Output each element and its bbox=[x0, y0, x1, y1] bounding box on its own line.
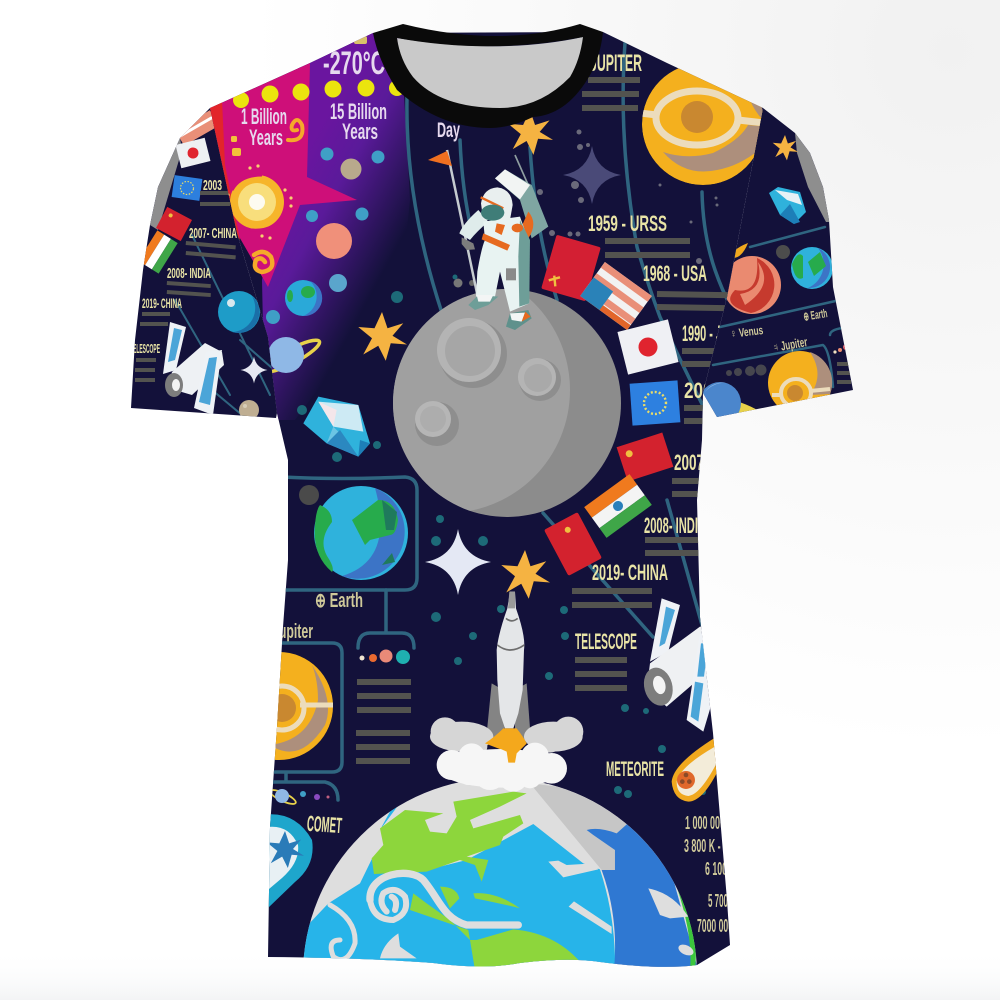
moon bbox=[324, 267, 621, 517]
icon: swirl bbox=[254, 252, 272, 272]
crater: right bbox=[518, 358, 561, 401]
bars: 2008 bbox=[645, 537, 700, 556]
flag: USA sleeve bbox=[180, 110, 214, 144]
bars: 1959 bbox=[605, 238, 690, 258]
star: white sleeve bbox=[240, 356, 268, 384]
planet: jupiter sleeve bbox=[768, 351, 832, 406]
flame tip bbox=[488, 743, 527, 763]
body bbox=[200, 20, 780, 980]
meteorite bbox=[672, 737, 720, 802]
dots: mini planets bbox=[833, 344, 846, 354]
label: -270°C: -270°C bbox=[323, 45, 385, 81]
suit detail bbox=[482, 233, 510, 251]
planet: saturn mini bbox=[269, 787, 297, 807]
dot: gray bbox=[776, 245, 790, 259]
label: 2007: 2007- C bbox=[674, 450, 722, 475]
label: 1 billion years: Years bbox=[249, 125, 283, 150]
flag: EU bbox=[630, 380, 680, 426]
dots: yellow row bbox=[233, 80, 405, 108]
stats text: 5 700 bbox=[708, 891, 728, 911]
dots: mini bbox=[300, 791, 330, 800]
orbit lines bbox=[407, 43, 730, 637]
icon: yellow blocks bbox=[231, 136, 241, 156]
bars: 1990 bbox=[682, 348, 722, 367]
label: 1959 URSS: 1959 - URSS bbox=[588, 211, 667, 236]
planet: tan sleeve bbox=[239, 400, 259, 417]
gem bbox=[303, 397, 370, 457]
bars: jupiter bbox=[582, 77, 640, 111]
planet: blue sleeve bbox=[218, 291, 260, 333]
body: 7000 000 bbox=[697, 916, 733, 936]
dots: row bbox=[726, 364, 766, 376]
frame lines bbox=[713, 227, 842, 387]
labels: sleeve timeline: 2007- CHINA bbox=[189, 225, 237, 242]
label: Venus: ♀ Venus bbox=[730, 323, 764, 341]
bars: 2003 bbox=[684, 405, 714, 424]
dots: planets upper left bbox=[266, 148, 475, 324]
bars: sleeve bbox=[837, 362, 851, 384]
flag: EU sleeve bbox=[172, 175, 202, 201]
stats text: 3 800 K - 3 bbox=[684, 836, 728, 856]
body: 1990 - J bbox=[682, 321, 722, 346]
label: 15 billion years: Years bbox=[342, 119, 378, 144]
helmet bbox=[481, 187, 513, 220]
star: orange left bbox=[358, 312, 407, 361]
planet: small earth bbox=[285, 280, 322, 316]
right sleeve bbox=[703, 108, 853, 417]
flag: Japan bbox=[617, 319, 679, 375]
collar bbox=[373, 24, 603, 128]
planet: earth sleeve bbox=[791, 247, 833, 289]
body: METEORITE bbox=[606, 758, 664, 781]
dot: gray earth bbox=[299, 485, 319, 505]
white smoke bbox=[437, 743, 567, 792]
flag: India bbox=[584, 474, 652, 538]
boots bbox=[468, 295, 498, 310]
labels: sleeve timeline: TELESCOPE bbox=[130, 341, 160, 356]
label: 15 billion years bbox=[330, 103, 386, 139]
magenta burst bbox=[210, 63, 357, 287]
floor tint bbox=[0, 950, 1000, 1000]
star: orange sleeve bbox=[773, 135, 798, 160]
labels: sleeve timeline bbox=[130, 177, 237, 382]
inside back of the shirt bbox=[397, 37, 583, 112]
body: TELESCOPE bbox=[575, 629, 637, 654]
swatch: top yellow bbox=[354, 36, 367, 44]
mini planets bbox=[360, 650, 410, 664]
planet: jupiter large bbox=[640, 63, 770, 185]
label: Jupiter: ♃ Jupiter bbox=[771, 334, 808, 355]
planet frame: jupiter bbox=[273, 643, 342, 800]
earth bbox=[297, 770, 703, 977]
flag: USA bbox=[580, 262, 652, 330]
label: Day: Day bbox=[437, 119, 460, 142]
purple burst bbox=[262, 25, 410, 420]
backpack bbox=[495, 169, 548, 238]
dots: gray near star bbox=[537, 130, 718, 264]
sleeve gray sliver bbox=[795, 133, 830, 222]
legs and torso bbox=[476, 217, 529, 312]
label: 15 billion years: 15 Billion bbox=[330, 99, 387, 124]
flag: China sleeve bbox=[156, 207, 192, 241]
planet: jupiter small bbox=[225, 652, 333, 760]
arm bbox=[459, 210, 488, 240]
planet frame: earth bbox=[282, 477, 417, 590]
rocket body bbox=[497, 592, 524, 728]
icon: galaxy bbox=[226, 164, 293, 240]
sleeve gray sliver bbox=[150, 138, 182, 230]
telescope satellite bbox=[640, 598, 717, 732]
labels: sleeve timeline: 2008- INDIA bbox=[167, 265, 211, 282]
label: earth: ⊕ Earth bbox=[315, 590, 363, 612]
label: 2008 INDIA: 2008- INDIA bbox=[644, 513, 706, 538]
stats text: 6 100 bbox=[705, 859, 727, 879]
flag: URSS bbox=[541, 235, 601, 301]
rocket bbox=[430, 592, 583, 792]
planet: earth medium bbox=[314, 486, 408, 580]
rocket fins bbox=[486, 683, 505, 741]
star: white bbox=[425, 529, 491, 595]
label: 2003: 2003 bbox=[684, 378, 722, 403]
dots: teal bbox=[297, 405, 706, 798]
antenna bbox=[515, 155, 547, 227]
labels: sleeve timeline: 2003 bbox=[203, 177, 222, 194]
comet pin bbox=[262, 814, 313, 908]
gray smoke bbox=[430, 717, 583, 754]
icon: swirl small bbox=[288, 120, 302, 140]
gem: sleeve bbox=[769, 187, 806, 224]
label: 2019 CHINA: 2019- CHINA bbox=[592, 560, 668, 585]
satellite: sleeve bbox=[163, 322, 224, 415]
stats text bbox=[684, 813, 733, 936]
star: orange lower bbox=[501, 550, 550, 599]
label: Earth: ⊕ Earth bbox=[802, 306, 828, 324]
flag pole and pennant bbox=[428, 150, 478, 298]
flame bbox=[485, 728, 527, 763]
bars: 2007 bbox=[672, 478, 702, 497]
bracket: earth to mini planets bbox=[358, 590, 414, 648]
flag: China bbox=[617, 432, 673, 482]
crater: large bbox=[437, 318, 507, 388]
label: JUPITER: JUPITER bbox=[590, 50, 642, 77]
labels: sleeve timeline: 2019- CHINA bbox=[142, 295, 182, 311]
label: 1 billion years bbox=[242, 108, 286, 145]
label: 1968 USA: 1968 - USA bbox=[643, 261, 707, 286]
planet: venus bbox=[723, 256, 781, 314]
bars: telescope bbox=[575, 657, 627, 691]
left sleeve bbox=[131, 108, 277, 418]
red edge bbox=[208, 100, 240, 240]
star: orange top bbox=[508, 110, 553, 155]
stats text: 1 000 000 bbox=[685, 813, 725, 833]
star: purple bbox=[563, 146, 621, 204]
bars: 1968 bbox=[657, 291, 732, 311]
flag: Japan sleeve bbox=[176, 138, 210, 168]
label: jupiter: Jupiter bbox=[272, 621, 313, 643]
crater: lower bbox=[415, 401, 459, 446]
astronaut bbox=[459, 155, 548, 330]
bars: 2019 bbox=[572, 588, 652, 608]
comet fragment bbox=[734, 243, 748, 258]
flag: India sleeve bbox=[144, 230, 178, 274]
planet: saturn bbox=[261, 335, 323, 377]
bars: middle bbox=[356, 679, 411, 764]
body: COMET bbox=[306, 811, 343, 838]
flag: China lower bbox=[544, 512, 602, 576]
planet: saturn sleeve bbox=[703, 382, 756, 417]
label: 1 billion years: 1 Billion bbox=[241, 104, 287, 129]
